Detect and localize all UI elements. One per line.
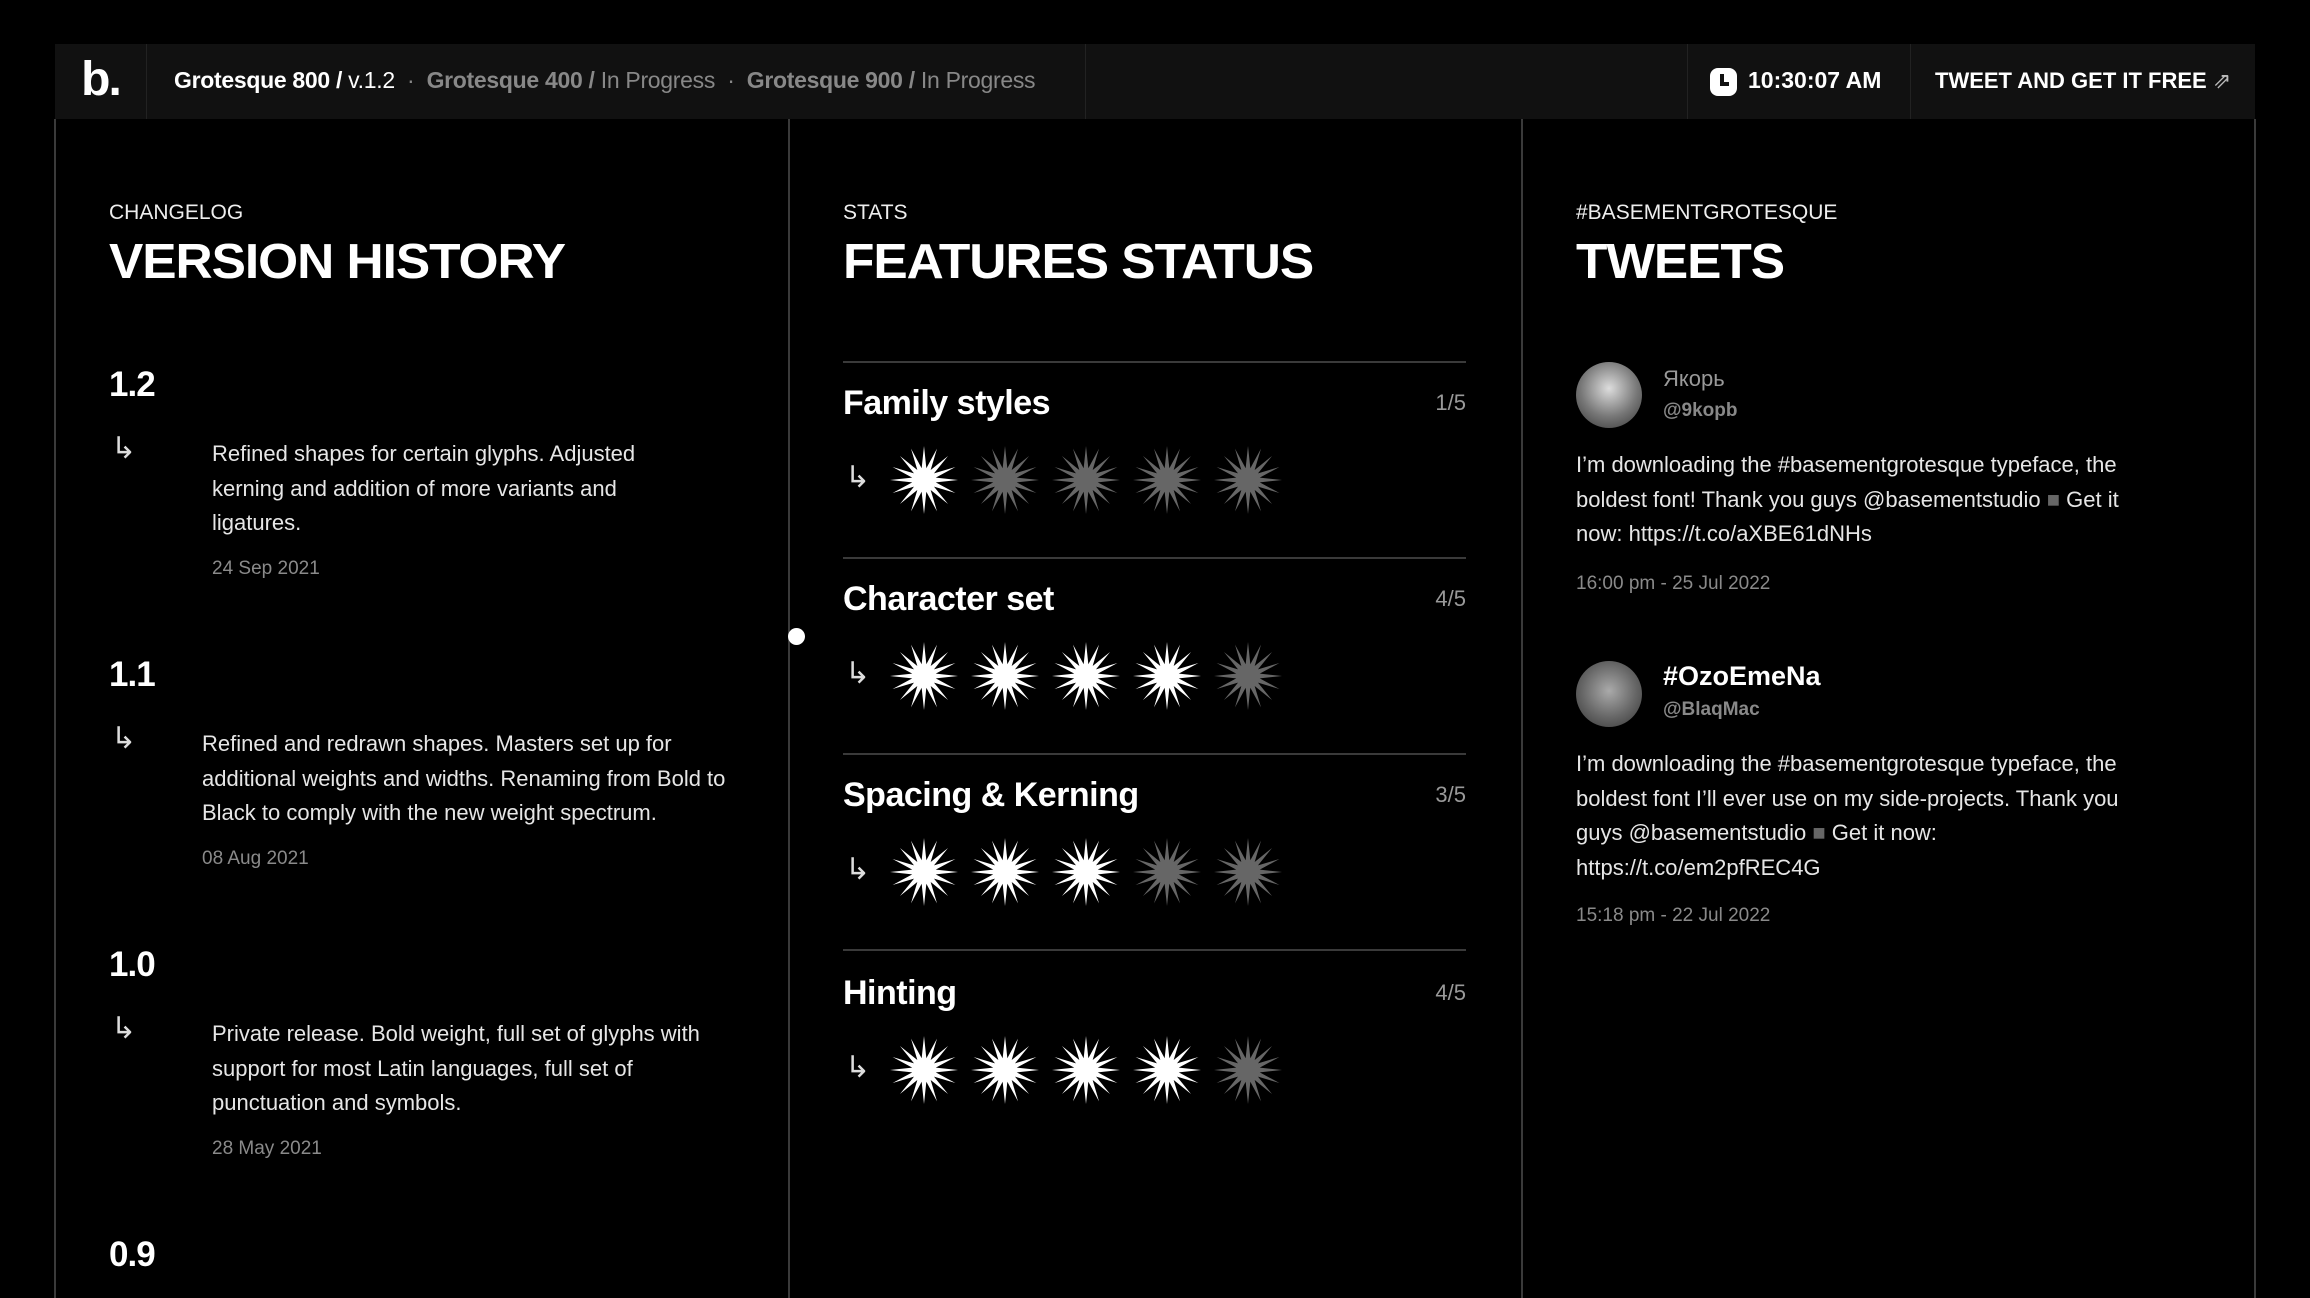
- heading: CHANGELOG: [109, 201, 243, 224]
- entry 1.1: ↳: [111, 722, 136, 755]
- rating stars 4/5: [890, 1036, 1282, 1104]
- panel: features status: [843, 201, 1313, 289]
- entry 1.0: ↳: [111, 1012, 136, 1045]
- logo: [55, 44, 147, 119]
- nav divider: [1085, 44, 1086, 119]
- entry 1.2: Refined shapes for certain glyphs. Adjusted kerning and addition of more variants and ligatures.: [212, 441, 635, 535]
- rating stars 1/5: [890, 446, 1282, 514]
- logo: b.: [81, 53, 120, 106]
- entry 1.2: [109, 365, 635, 579]
- feature: family styles: Family styles: [843, 384, 1050, 422]
- feature: hinting: ↳: [845, 1051, 870, 1084]
- tweet 2: @BlaqMac: [1663, 699, 1760, 720]
- entry 1.1: 1.1: [109, 655, 155, 694]
- avatar: [1576, 362, 1642, 428]
- tweet 1: Якорь: [1663, 366, 1725, 391]
- feature: spacing & kerning: ↳: [845, 853, 870, 886]
- rating stars 4/5: [890, 642, 1282, 710]
- panel: version history: [109, 201, 725, 1274]
- avatar: [1576, 661, 1642, 727]
- feature: family styles: 1/5: [1435, 390, 1466, 415]
- feature: spacing & kerning: [843, 776, 1466, 906]
- tweet 1: 16:00 pm - 25 Jul 2022: [1576, 573, 1770, 594]
- entry 1.0: 1.0: [109, 945, 155, 984]
- feature: hinting: Hinting: [843, 974, 957, 1012]
- feature: family styles: ↳: [845, 461, 870, 494]
- entry 1.0: [109, 945, 700, 1159]
- panel: tweets: TWEETS: [1576, 235, 1784, 289]
- feature: hinting: 4/5: [1435, 980, 1466, 1005]
- heading: STATS: [843, 201, 908, 224]
- rating stars 3/5: [890, 838, 1282, 906]
- entry 1.1: 08 Aug 2021: [202, 848, 309, 869]
- entry 1.2: ↳: [111, 432, 136, 465]
- heading: #BASEMENTGROTESQUE: [1576, 201, 1837, 224]
- feature: hinting: [843, 974, 1466, 1104]
- entry 1.0: Private release. Bold weight, full set of glyphs with support for most Latin languages, full set of punctuation and symbols.: [212, 1021, 700, 1115]
- tweet 2: [1576, 661, 2119, 926]
- entry 1.0: 28 May 2021: [212, 1138, 322, 1159]
- slider dot: [788, 628, 805, 645]
- header bar: [55, 44, 2255, 119]
- feature: spacing & kerning: Spacing & Kerning: [843, 776, 1139, 814]
- tweet 2: I’m downloading the #basementgrotesque typeface, the boldest font I’ll ever use on my side-projects. Thank you guys @basementstudio ■ Get it now: https://t.co/em2pfREC4G: [1576, 751, 2119, 880]
- panel: tweets: [1576, 201, 2119, 926]
- entry 1.2: 1.2: [109, 365, 155, 404]
- feature: character set: Character set: [843, 580, 1054, 618]
- feature: character set: ↳: [845, 657, 870, 690]
- feature: family styles: [843, 384, 1466, 514]
- tweet 1: @9kopb: [1663, 400, 1737, 421]
- tweet 1: I’m downloading the #basementgrotesque typeface, the boldest font! Thank you guys @basementstudio ■ Get it now: https://t.co/aXBE61dNHs: [1576, 452, 2119, 546]
- panel: features status: FEATURES STATUS: [843, 235, 1313, 289]
- entry 1.1: Refined and redrawn shapes. Masters set up for additional weights and widths. Renaming from Bold to Black to comply with the new weight spectrum.: [202, 731, 725, 825]
- tweet 2: 15:18 pm - 22 Jul 2022: [1576, 905, 1770, 926]
- clock: [1687, 44, 1911, 119]
- clock: 10:30:07 AM: [1748, 67, 1881, 93]
- feature: character set: 4/5: [1435, 586, 1466, 611]
- entry 1.1: [109, 655, 725, 869]
- feature: spacing & kerning: 3/5: [1435, 782, 1466, 807]
- feature: character set: [843, 580, 1466, 710]
- panel: version history: VERSION HISTORY: [109, 235, 565, 289]
- tweet 2: #OzoEmeNa: [1663, 661, 1821, 691]
- cta: tweet: TWEET AND GET IT FREE ⇗: [1935, 68, 2231, 93]
- tweet 1: [1576, 362, 2119, 594]
- font versions nav: Grotesque 800 / v.1.2 · Grotesque 400 / In Progress · Grotesque 900 / In Progress: [174, 67, 1035, 93]
- entry 0.9: 0.9: [109, 1235, 155, 1274]
- entry 1.2: 24 Sep 2021: [212, 558, 320, 579]
- icon: clock: [1710, 68, 1737, 96]
